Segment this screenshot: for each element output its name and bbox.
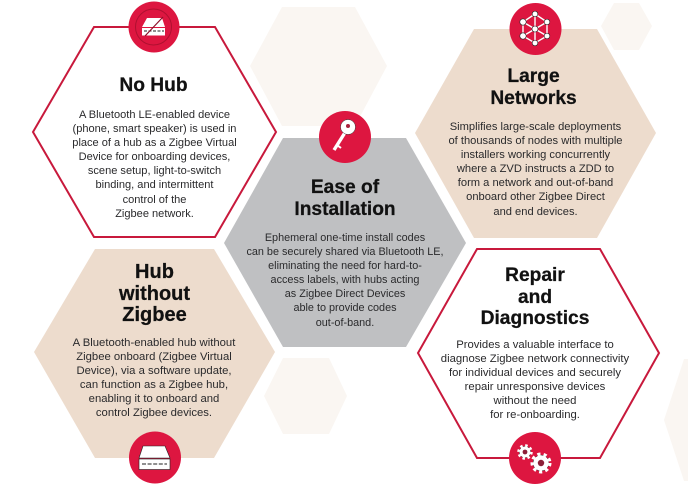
panel: No Hub hexagon bbox=[33, 27, 276, 237]
text: No Hub body: place of a hub as a Zigbee Virtual bbox=[72, 137, 237, 149]
text: No Hub body: Zigbee network. bbox=[115, 208, 194, 220]
icon: key bbox=[319, 111, 371, 163]
heading: Large Networks: Large bbox=[507, 66, 560, 87]
panel: Hub without Zigbee hexagon bbox=[34, 249, 275, 458]
heading: Large Networks bbox=[490, 66, 577, 108]
text: Ease of Installation body: out-of-band. bbox=[316, 317, 374, 329]
text: Repair and Diagnostics body: for re-onboarding. bbox=[490, 409, 580, 421]
text: Hub without Zigbee body: Zigbee onboard (Zigbee Virtual bbox=[76, 351, 232, 363]
text: Repair and Diagnostics body: diagnose Zigbee network connectivity bbox=[441, 353, 629, 365]
panel: Repair and Diagnostics hexagon bbox=[418, 249, 659, 458]
panel: Ease of Installation hexagon bbox=[224, 138, 466, 347]
text: Hub without Zigbee body: Device), via a software update, bbox=[76, 365, 232, 377]
text: No Hub body: binding, and intermittent bbox=[96, 179, 213, 191]
text: Hub without Zigbee body: control Zigbee devices. bbox=[96, 407, 212, 419]
text: Hub without Zigbee body bbox=[72, 337, 236, 419]
text: Ease of Installation body: Ephemeral one-time install codes bbox=[265, 232, 425, 244]
icon: network bbox=[510, 3, 562, 55]
text: Hub without Zigbee body: can function as a Zigbee hub, bbox=[80, 379, 228, 391]
text: Repair and Diagnostics body: for individual devices and securely bbox=[449, 367, 621, 379]
text: Repair and Diagnostics body: Provides a valuable interface to bbox=[456, 339, 614, 351]
heading: Ease of Installation: Ease of bbox=[311, 177, 379, 198]
text: Repair and Diagnostics body bbox=[441, 339, 630, 421]
heading: Ease of Installation bbox=[294, 177, 396, 220]
heading: Large Networks: Networks bbox=[490, 88, 577, 108]
text: No Hub body bbox=[72, 109, 237, 220]
heading: Repair and Diagnostics: Repair bbox=[505, 265, 565, 286]
text: Large Networks body: and end devices. bbox=[493, 206, 578, 218]
text: Large Networks body bbox=[448, 121, 623, 218]
text: No Hub body: control of the bbox=[123, 194, 186, 206]
text: Ease of Installation body bbox=[246, 232, 444, 329]
text: Ease of Installation body: able to provide codes bbox=[293, 302, 397, 314]
text: Large Networks body: installers working concurrently bbox=[461, 149, 610, 161]
text: Ease of Installation body: eliminating the need for hard-to- bbox=[268, 260, 422, 272]
heading: Hub without Zigbee: without bbox=[119, 282, 190, 304]
heading: Hub without Zigbee bbox=[118, 261, 190, 326]
text: Repair and Diagnostics body: without the need bbox=[494, 395, 576, 407]
icon: gears bbox=[509, 432, 561, 484]
text: Large Networks body: onboard other Zigbee Direct bbox=[466, 191, 605, 203]
heading: Hub without Zigbee: Zigbee bbox=[122, 304, 187, 326]
text: Hub without Zigbee body: A Bluetooth-enabled hub without bbox=[73, 337, 235, 349]
heading: Repair and Diagnostics: and bbox=[518, 286, 552, 308]
icon: hub bbox=[129, 432, 181, 484]
heading: No Hub: No Hub bbox=[119, 75, 188, 96]
text: No Hub body: A Bluetooth LE-enabled device bbox=[79, 109, 230, 121]
icon: no hub bbox=[128, 2, 180, 52]
text: No Hub body: Device for onboarding devices, bbox=[79, 151, 230, 163]
text: Repair and Diagnostics body: repair unresponsive devices bbox=[465, 381, 605, 393]
text: Ease of Installation body: as Zigbee Direct Devices bbox=[285, 288, 405, 300]
heading: Repair and Diagnostics bbox=[481, 265, 589, 329]
text: Large Networks body: where a ZVD instructs a ZDD to bbox=[457, 163, 614, 175]
text: No Hub body: scene setup, light-to-switch bbox=[88, 165, 221, 177]
heading: Repair and Diagnostics: Diagnostics bbox=[481, 308, 589, 329]
panel: Large Networks hexagon bbox=[415, 29, 656, 238]
heading: Hub without Zigbee: Hub bbox=[135, 261, 174, 283]
text: Hub without Zigbee body: enabling it to onboard and bbox=[89, 393, 219, 405]
text: No Hub body: (phone, smart speaker) is used in bbox=[73, 123, 236, 135]
text: Ease of Installation body: access labels, with hubs acting bbox=[271, 274, 419, 286]
heading: Ease of Installation: Installation bbox=[294, 198, 396, 220]
text: Large Networks body: of thousands of nodes with multiple bbox=[448, 135, 623, 147]
text: Ease of Installation body: can be securely shared via Bluetooth LE, bbox=[246, 246, 444, 258]
text: Large Networks body: Simplifies large-scale deployments bbox=[450, 121, 621, 133]
text: Large Networks body: form a network and out-of-band bbox=[458, 177, 613, 189]
